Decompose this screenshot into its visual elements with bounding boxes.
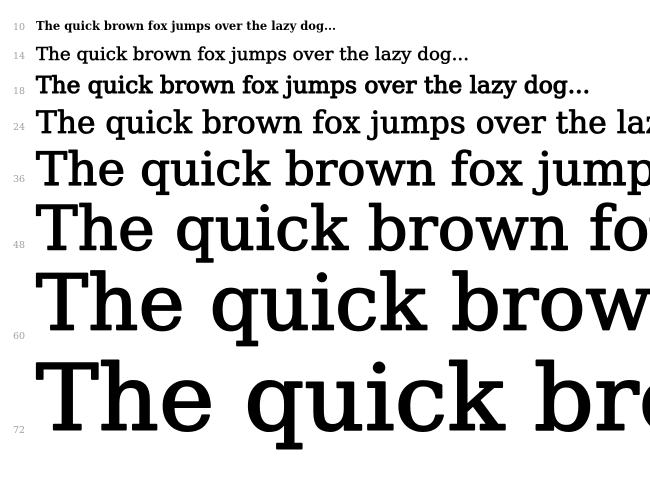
specimen line: size 24: 24 [13, 122, 25, 133]
specimen line: size 14: The quick brown fox jumps over the lazy dog... [36, 44, 469, 65]
specimen line: size 18: 18 [13, 86, 25, 97]
specimen line: size 60: 60 [13, 331, 25, 342]
specimen line: size 10: 10 [13, 22, 25, 33]
specimen line: size 36: 36 [13, 174, 25, 185]
specimen line: size 48: 48 [13, 240, 25, 251]
specimen line: size 18: The quick brown fox jumps over the lazy dog... [36, 73, 590, 99]
specimen line: size 72: 72 [13, 425, 25, 436]
specimen line: size 10: The quick brown fox jumps over the lazy dog... [36, 18, 336, 33]
specimen line: size 14: 14 [13, 51, 25, 62]
